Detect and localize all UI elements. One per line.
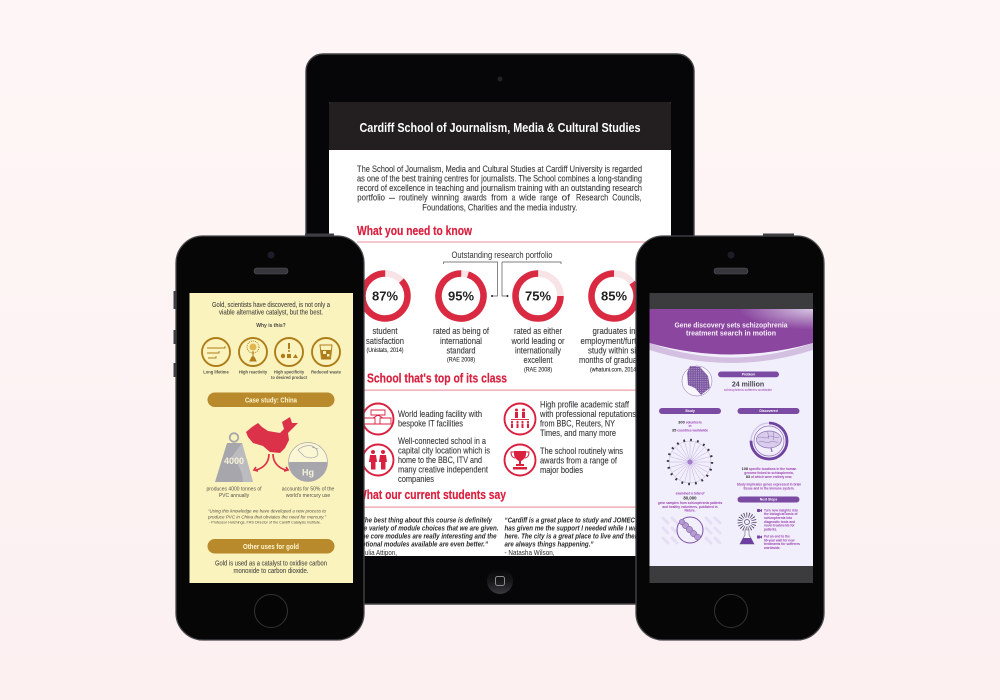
student quotes: optional modules available are even better.” <box>358 540 488 548</box>
class benefits text: capital city location which is <box>398 446 490 456</box>
study result text: 80,000 <box>683 496 697 500</box>
next steps text: patients. <box>764 527 777 531</box>
class benefits text: bespoke IT facilities <box>398 418 463 428</box>
heading: what you need to know: What you need to know <box>357 223 473 238</box>
purple screen <box>650 293 813 583</box>
pill: next steps <box>738 496 800 502</box>
left phone <box>174 234 364 640</box>
pill: study <box>659 408 721 414</box>
bracket: outstanding research portfolio <box>444 250 561 297</box>
statistics captions <box>206 486 334 499</box>
study volunteers text <box>672 420 708 432</box>
student quotes: “The best thing about this course is definitely <box>358 516 493 524</box>
statistics captions: PVC annually <box>219 493 250 499</box>
study result text: examined a total of <box>676 492 705 496</box>
icon captions <box>203 370 342 380</box>
stat: 24 million: schizophrenia sufferers worldwide <box>724 388 772 392</box>
discovered text: 83 of which were entirely new. <box>746 475 792 479</box>
intro text: viable alternative catalyst, but the best. <box>219 308 323 316</box>
statistics captions: accounts for 50% of the <box>282 486 334 492</box>
donut captions: (RAE 2008) <box>447 358 475 364</box>
intro paragraph: wide <box>518 193 536 203</box>
arrows from China <box>254 454 288 471</box>
globe: Hg: Hg <box>302 468 314 478</box>
donut captions: (RAE 2008) <box>524 368 552 374</box>
globe: Hg <box>288 442 328 482</box>
intro paragraph: of <box>562 193 570 203</box>
donut: 95%: 95% <box>448 288 474 304</box>
home button <box>714 594 748 628</box>
icon: high reactivity <box>239 338 267 366</box>
class benefits text: with professional reputations <box>539 409 636 419</box>
icon captions: to desired product <box>271 375 308 380</box>
icon: DNA <box>677 517 703 543</box>
student quotes: - Julia Attipon, <box>358 548 397 557</box>
tablet camera <box>498 76 502 82</box>
study result text: and healthy volunteers, published in <box>662 505 718 509</box>
next steps bullets <box>757 509 762 538</box>
donut: 75% <box>516 274 560 318</box>
donut captions: rated as either <box>514 326 562 336</box>
pill: case study: Case study: China <box>245 396 298 404</box>
phone body <box>176 236 364 640</box>
bracket: outstanding research portfolio: Outstanding research portfolio <box>452 250 552 260</box>
icon: IT facilities <box>362 404 394 434</box>
student quotes: - Natasha Wilson, <box>504 548 554 557</box>
donut: 95% <box>435 270 487 322</box>
intro paragraph: Councils, <box>612 193 642 203</box>
student quotes: The core modules are really interesting and the <box>358 532 496 540</box>
pill: other uses: Other uses for gold <box>243 542 299 551</box>
pill: study: Study <box>685 409 695 413</box>
dna pattern background <box>663 518 720 543</box>
gold screen <box>190 293 353 583</box>
study volunteers text: 35 countries worldwide <box>672 428 708 432</box>
icon: high specificity <box>275 338 303 366</box>
next steps text <box>763 508 800 550</box>
icon: people <box>362 444 394 476</box>
icon: flask with rays <box>740 515 754 544</box>
discovered text: tissue and in the immune system. <box>743 486 795 490</box>
discovered text: Study implicates genes expressed in brain <box>737 482 801 486</box>
next steps text: worldwide. <box>763 546 781 550</box>
pill: case study <box>208 392 334 407</box>
next steps text: treatments for sufferers <box>764 542 800 546</box>
donut captions <box>366 326 649 374</box>
intro paragraph: from <box>491 193 508 203</box>
pill: problem <box>718 372 779 377</box>
donut captions: (Unistats, 2014) <box>366 348 404 354</box>
student quotes: has given me the support I needed while I was <box>504 524 640 532</box>
class benefits text: home to the BBC, ITV and <box>398 455 482 465</box>
study result text: gene samples from schizophrenia patients <box>658 501 722 505</box>
quote: - Professor Hutchings, FRS Director of the Cardiff Catalysis Institute. <box>209 520 321 524</box>
class benefits text: The school routinely wins <box>540 446 623 456</box>
next steps text: Turn new insights into <box>764 508 798 512</box>
right phone <box>636 234 824 640</box>
intro paragraph: winning <box>431 193 459 203</box>
study result text <box>658 492 722 512</box>
donut captions: standard <box>446 346 476 356</box>
screen header: treatment search in motion <box>686 328 776 338</box>
tablet body <box>306 54 694 604</box>
intro paragraph: Foundations, Charities and the media industry. <box>422 202 577 212</box>
intro text: Why is this? <box>256 323 286 329</box>
class benefits text: major bodies <box>540 465 583 475</box>
donut captions: satisfaction <box>366 336 404 346</box>
donut captions: rated as being of <box>433 326 489 336</box>
donut captions: employment/further <box>580 336 648 346</box>
closing text: Gold is used as a catalyst to oxidise carbon <box>215 560 327 568</box>
icon: trophy <box>504 444 536 476</box>
tablet <box>306 54 694 604</box>
pill: problem: Problem <box>742 373 755 377</box>
map: China <box>246 417 298 453</box>
closing text: monoxide to carbon dioxide. <box>234 568 309 575</box>
donut captions: internationally <box>515 346 561 356</box>
donut captions: study within six <box>588 346 640 356</box>
phone side buttons <box>174 234 334 377</box>
weight: 4000 <box>215 433 253 482</box>
intro paragraph: awards <box>463 193 487 203</box>
class benefits text: Well-connected school in a <box>398 436 487 446</box>
next steps text: schizophrenia into <box>764 516 792 520</box>
quote: produce PVC in China that obviates the need for mercury.” <box>207 514 326 520</box>
stat: 24 million: 24 million <box>732 382 764 388</box>
icon captions: High reactivity <box>239 370 268 374</box>
study volunteers text: in <box>689 424 691 428</box>
closing text <box>215 560 327 575</box>
donut captions: student <box>372 326 398 336</box>
heading: top of its class: School that's top of its class <box>367 370 507 386</box>
intro text <box>212 300 330 329</box>
icon: brain <box>751 423 787 459</box>
donut captions: international <box>440 336 482 346</box>
icon: reduced waste <box>312 338 340 366</box>
class benefits text: many creative independent <box>398 464 488 474</box>
intro paragraph: The School of Journalism, Media and Cultural Studies at Cardiff University is regarded <box>357 164 642 174</box>
intro paragraph: – <box>389 193 396 203</box>
class benefits text: from BBC, Reuters, NY <box>540 418 615 428</box>
pill: discovered: Discovered <box>759 409 778 413</box>
discovered text: genome linked to schizophrenia, <box>744 471 794 475</box>
donut captions: world leading or <box>511 336 564 346</box>
class benefits text: World leading facility with <box>398 409 482 419</box>
donut captions: graduates in <box>592 326 636 336</box>
class benefits text: awards from a range of <box>540 456 617 466</box>
phone camera and speaker <box>714 252 748 274</box>
chart: volunteers wheel <box>668 440 712 484</box>
donut captions: (whatuni.com, 2014) <box>590 368 638 374</box>
class benefits text <box>398 400 636 484</box>
student quotes: here. The city is a great place to live and there <box>504 532 640 540</box>
pill: discovered <box>738 408 800 414</box>
icon: long lifetime <box>202 338 230 366</box>
intro paragraph: a <box>512 193 516 203</box>
pill: next steps: Next Steps <box>760 498 777 502</box>
next steps text: the biological basis of <box>764 512 798 516</box>
intro text: Gold, scientists have discovered, is not only a <box>212 300 330 309</box>
donut: 75%: 75% <box>525 288 551 304</box>
statistics captions: produces 4000 tonnes of <box>206 486 262 492</box>
donut: 87%: 87% <box>372 288 398 304</box>
icon captions: Long lifetime <box>203 370 229 374</box>
donut captions: months of graduation <box>579 355 649 365</box>
study volunteers text: 300 volunteers <box>678 420 702 424</box>
stat: 24 million <box>724 382 772 392</box>
device mockup scene <box>174 53 825 641</box>
pill: other uses <box>208 539 334 554</box>
quote: “Using this knowledge we have developed a new process to <box>208 508 326 514</box>
donut: 87% <box>364 270 411 322</box>
donut: 85%: 85% <box>601 288 627 304</box>
donut: 85% <box>588 270 636 322</box>
class benefits text: Times, and many more <box>540 428 616 438</box>
phone body <box>636 236 824 640</box>
tablet home button <box>487 568 513 594</box>
intro paragraph: record of excellence in teaching and journalism training with an outstanding research <box>357 183 642 193</box>
heading: students say: What our current students say <box>357 487 507 502</box>
screen header: Gene discovery sets schizophrenia <box>674 320 788 330</box>
screen header: Cardiff School of Journalism, Media & Cultural Studies <box>360 121 641 135</box>
screen header <box>650 309 813 363</box>
donut captions: excellent <box>524 355 553 365</box>
student quotes: “Cardiff is a great place to study and JOMEC <box>504 516 636 524</box>
quote <box>207 508 326 524</box>
icon captions: Reduced waste <box>311 370 342 374</box>
home button <box>254 594 288 628</box>
phone side buttons <box>763 234 794 236</box>
tablet screen <box>329 102 671 557</box>
next steps text: novel treatments for <box>764 524 795 528</box>
intro paragraph: range <box>540 193 557 203</box>
next steps text: 60-year wait for new <box>764 538 795 542</box>
icon captions: High specificity <box>274 370 305 374</box>
discovered text <box>737 467 801 490</box>
next steps text: Put an end to the <box>764 534 790 538</box>
globe <box>682 366 712 396</box>
student quotes <box>358 516 640 557</box>
next steps text: diagnostic tools and <box>764 520 795 524</box>
screen header <box>329 102 671 150</box>
class benefits text: companies <box>398 474 434 484</box>
discovered text: 108 specific locations in the human <box>742 467 796 471</box>
intro paragraph <box>357 164 642 212</box>
statistics captions: world's mercury use <box>286 493 330 499</box>
student quotes: are always things happening.” <box>504 540 594 548</box>
intro paragraph: as one of the best training centres for journalists. The School combines a long-standing <box>357 174 642 184</box>
study result text: Nature. <box>685 508 696 512</box>
student quotes: the variety of module choices that we are given. <box>358 524 498 532</box>
class benefits text: High profile academic staff <box>540 400 629 410</box>
icon: academic staff <box>504 404 536 434</box>
intro paragraph: Research <box>576 193 608 203</box>
intro paragraph: routinely <box>399 193 428 203</box>
phone camera and speaker <box>254 252 288 274</box>
intro paragraph: portfolio <box>357 193 385 203</box>
weight: 4000: 4000 <box>224 456 244 466</box>
